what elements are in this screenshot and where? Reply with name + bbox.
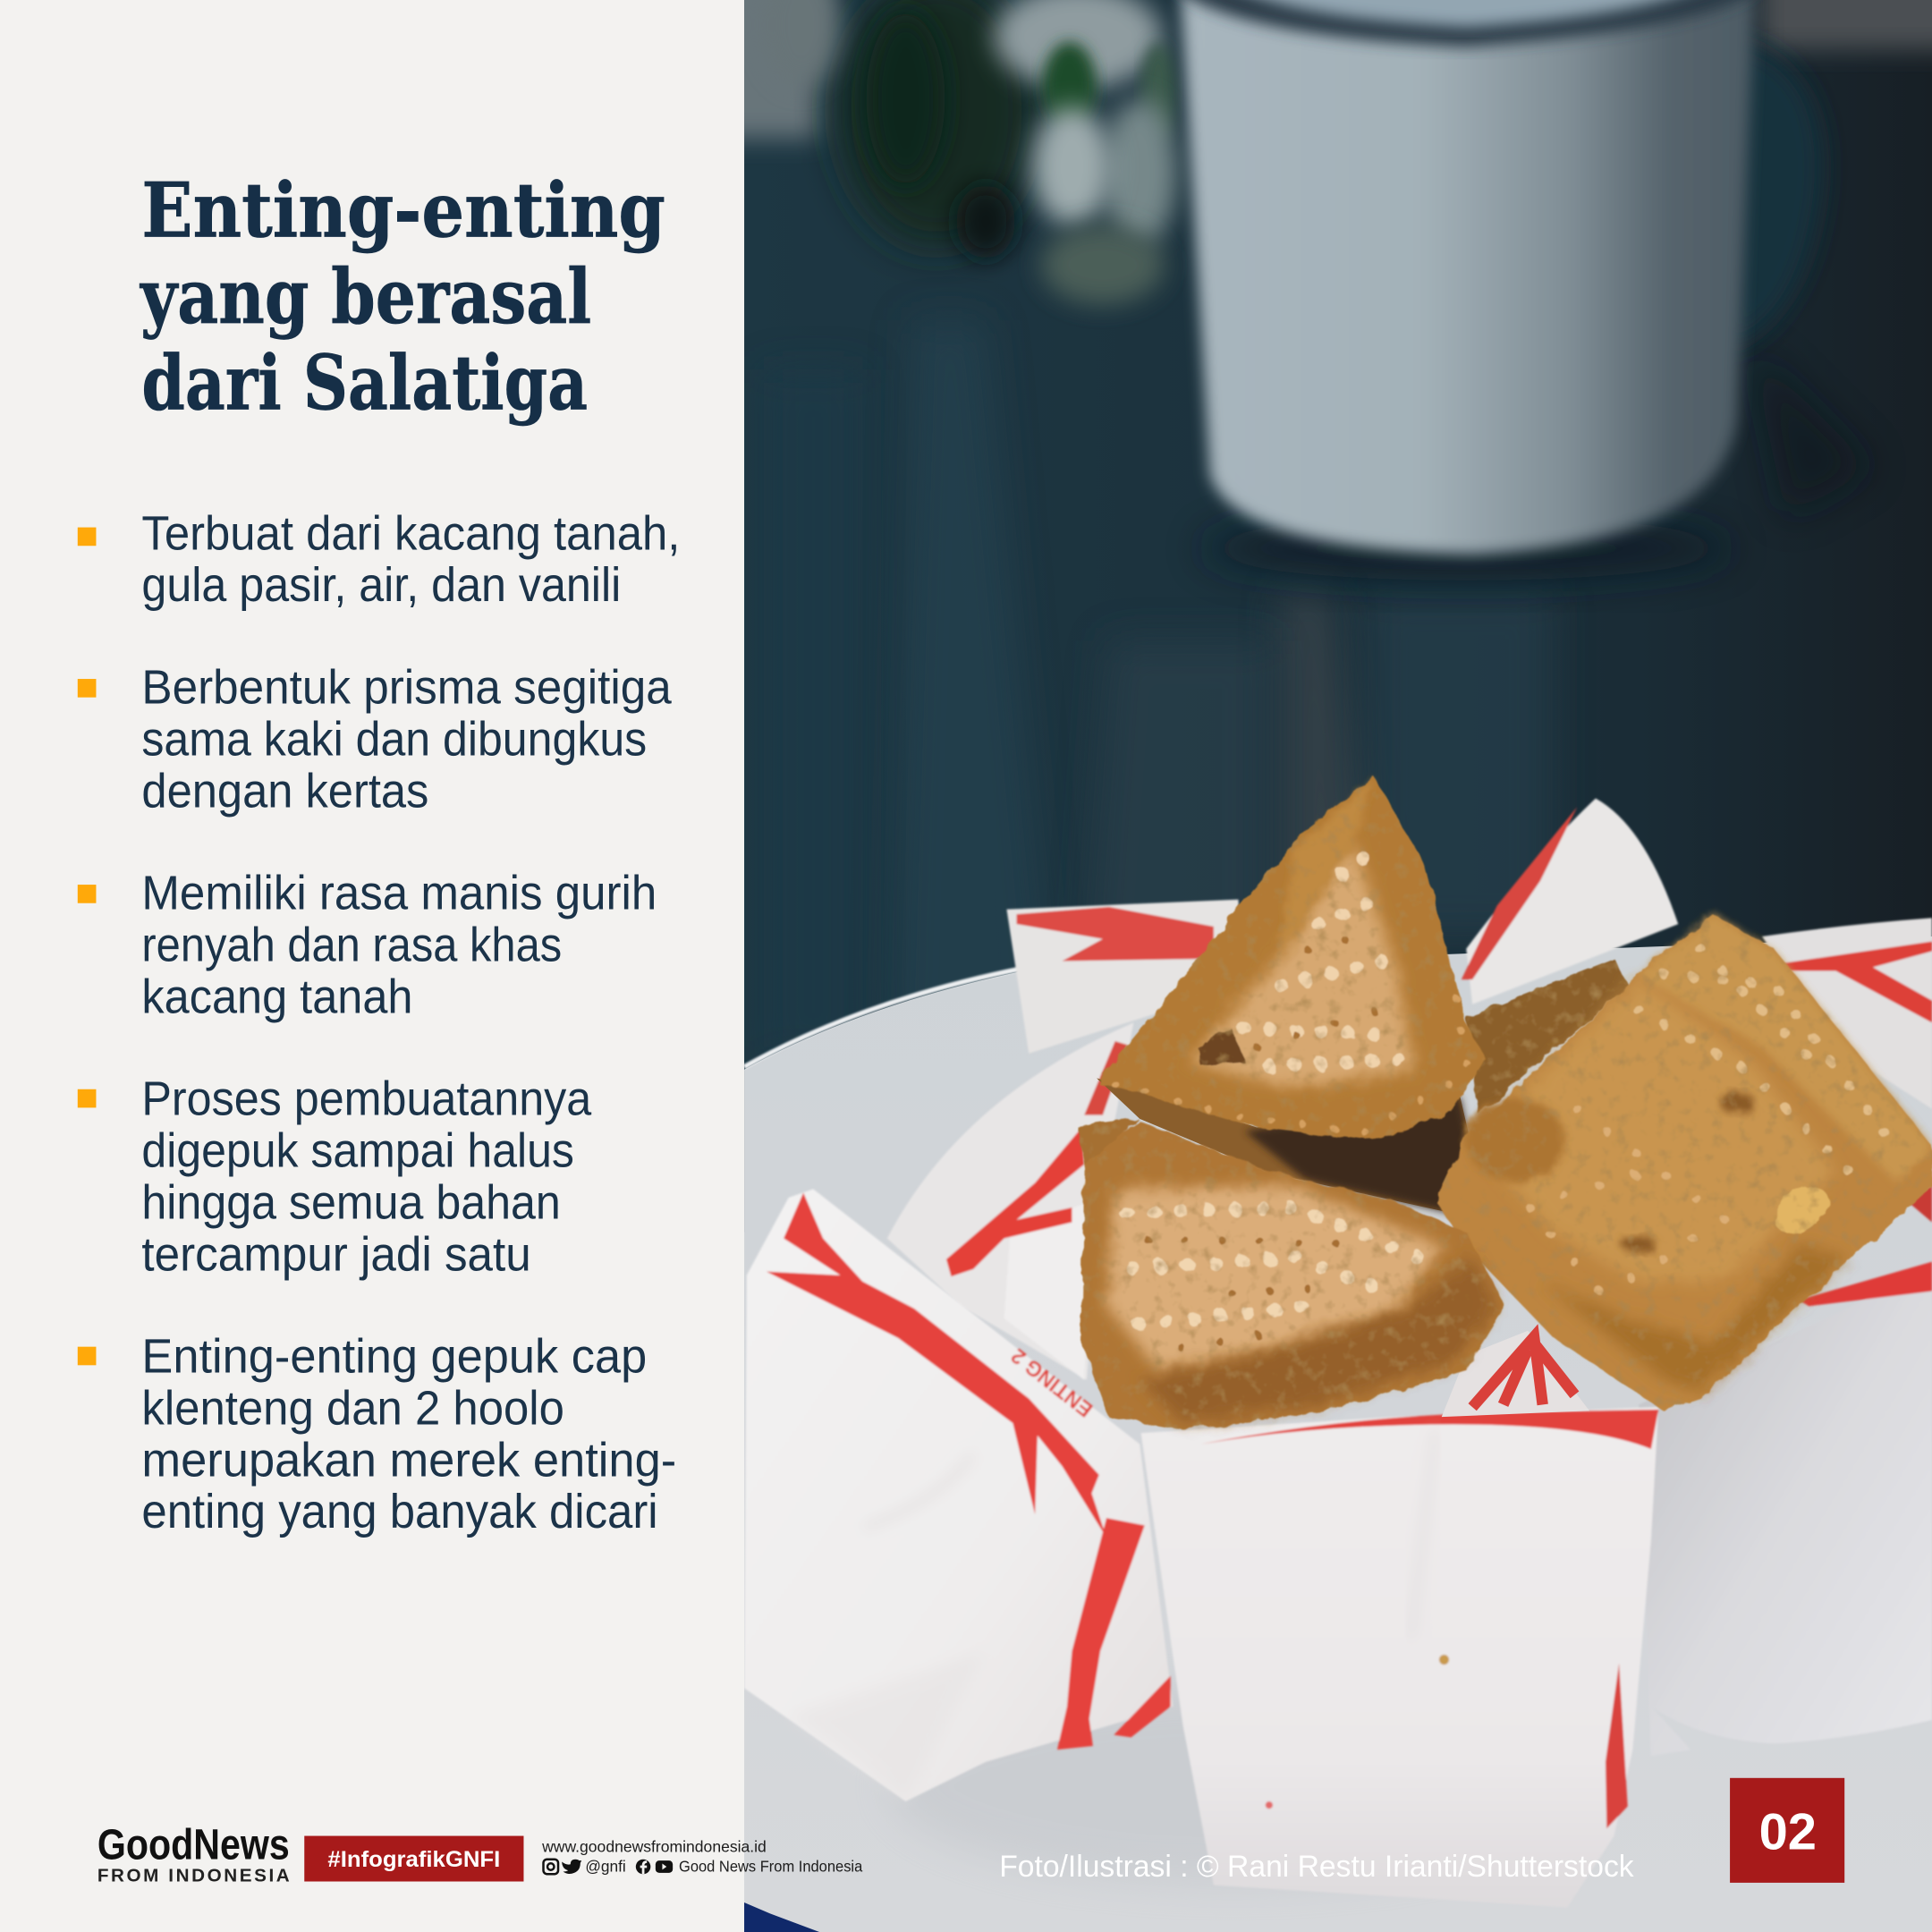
website and social handles: Good News From Indonesia (679, 1857, 862, 1875)
bullet 3: kacang tanah (141, 970, 412, 1023)
bullet 2 (78, 661, 672, 818)
photo: top enting piece (1097, 776, 1486, 1141)
page number badge: 02 (1759, 1804, 1817, 1861)
website and social handles: @gnfi (585, 1857, 626, 1875)
website and social handles (541, 1837, 862, 1875)
bullet 4: hingga semua bahan (141, 1175, 561, 1229)
photo: printed wrapper text: ENTING 2 (1006, 1344, 1097, 1422)
photo: right wrapped candy (1639, 1185, 1932, 1756)
icon: twitter (562, 1860, 581, 1874)
bullet 4: digepuk sampai halus (141, 1124, 574, 1178)
photo: white plate (744, 936, 1932, 1932)
photo: front wrapped candy (1141, 1407, 1658, 1907)
icon: instagram (544, 1860, 558, 1874)
title: Enting-enting (141, 165, 665, 254)
photo: dark wooden table (702, 0, 1932, 1233)
bullet list (78, 506, 680, 1538)
title: dari Salatiga (141, 338, 588, 427)
bullet 4: tercampur jadi satu (141, 1227, 531, 1281)
page number badge (1730, 1778, 1844, 1883)
photo: back wrapped candies (887, 799, 1932, 1380)
bullet 3 (78, 867, 657, 1023)
bullet 3: renyah dan rasa khas (141, 918, 562, 971)
bullet 5: Enting-enting gepuk cap (141, 1330, 647, 1384)
photo: bottom enting piece (1078, 1119, 1505, 1429)
panel: text background (0, 0, 744, 1932)
bullet 5: enting yang banyak dicari (141, 1485, 658, 1538)
icon: facebook (636, 1860, 650, 1874)
bullet 5: merupakan merek enting- (141, 1433, 676, 1487)
photo: enting-enting on a plate (702, 0, 1932, 1932)
bullet 1 (78, 506, 680, 612)
photo credit: Foto/Ilustrasi : © Rani Restu Irianti/Shutterstock (999, 1850, 1634, 1884)
title: yang berasal (139, 252, 591, 341)
logo: GoodNews from Indonesia (97, 1821, 290, 1886)
bullet 3: Memiliki rasa manis gurih (141, 867, 657, 920)
photo: left wrapped candy with red stripes (744, 1189, 1173, 1801)
bullet 2: sama kaki dan dibungkus (141, 712, 647, 766)
photo: right enting piece (1436, 914, 1932, 1411)
logo: GoodNews from Indonesia: FROM INDONESIA (97, 1866, 290, 1886)
logo: GoodNews from Indonesia: GoodNews (97, 1821, 290, 1869)
bullet 2: dengan kertas (141, 764, 428, 818)
bullet 5 (78, 1330, 676, 1538)
hashtag badge (304, 1836, 523, 1882)
photo: blurred enamel mug (1171, 0, 1823, 580)
website and social handles: www.goodnewsfromindonesia.id (541, 1837, 767, 1855)
photo: blurred plant (761, 0, 1177, 304)
bullet 1: gula pasir, air, dan vanili (141, 558, 621, 612)
bullet 4 (78, 1072, 591, 1281)
hashtag badge: #InfografikGNFI (327, 1848, 500, 1872)
bullet 5: klenteng dan 2 hoolo (141, 1381, 564, 1435)
bullet 1: Terbuat dari kacang tanah, (141, 506, 680, 560)
bullet 2: Berbentuk prisma segitiga (141, 661, 672, 715)
photo: hidden dark piece behind (1097, 959, 1629, 1417)
bullet 4: Proses pembuatannya (141, 1072, 591, 1126)
title (139, 165, 665, 427)
icon: youtube (656, 1860, 673, 1873)
